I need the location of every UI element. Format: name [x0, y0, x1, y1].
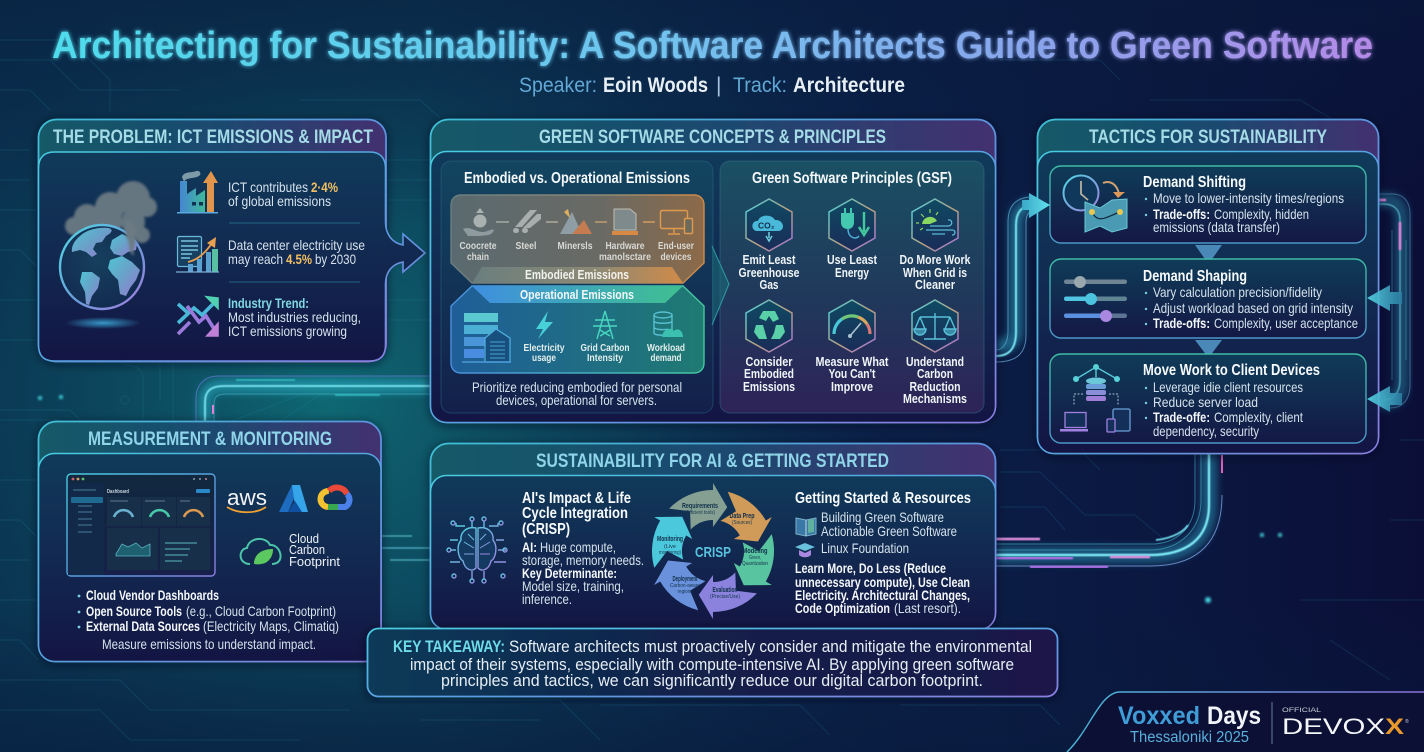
connector: measurement to AI glow — [381, 536, 430, 560]
text: AI impact: AI: — [522, 539, 537, 555]
panel heading: AI: SUSTAINABILITY FOR AI & GETTING STARTED — [536, 451, 889, 472]
sub-panel: green software principles — [712, 161, 984, 413]
arrow: into demand shifting — [1022, 193, 1050, 218]
card: move work to client devices: Leverage idie client resources — [1153, 379, 1303, 395]
card: demand shaping: Trade-offs: — [1153, 315, 1210, 331]
logo: aws: aws — [227, 485, 267, 510]
diagram: CRISP cycle: Requirements — [682, 503, 718, 510]
principle: understand carbon reduction mechanisms: Reduction — [910, 379, 961, 394]
panel heading: tactics: TACTICS FOR SUSTAINABILITY — [1089, 127, 1327, 148]
stat: industry trend: ICT emissions growing — [228, 323, 347, 339]
principle: measure what you can't improve: Improve — [831, 379, 873, 394]
stat: data center electricity — [228, 237, 365, 267]
card: demand shaping: Adjust workload based on grid intensity — [1153, 300, 1353, 316]
subtitle: speaker and track: Track: — [733, 74, 787, 97]
stat: ICT contributes: 2·4% — [311, 179, 338, 195]
stat: data center electricity: 4.5% — [286, 251, 312, 267]
card: move work to client devices — [1050, 354, 1366, 443]
subtitle: speaker and track: | — [716, 74, 721, 97]
block: operational emissions: Workload — [647, 342, 685, 354]
callout: key takeaway: impact of their systems, especially with compute-intensive AI. By applying green software — [410, 655, 1014, 674]
sub-panel: embodied vs operational — [441, 161, 713, 413]
panel: the problem — [38, 120, 425, 362]
list: measurement tools: (Electricity Maps, Climatiq) — [203, 618, 339, 634]
arrow: into client devices — [1367, 386, 1402, 412]
icon: hardware — [612, 209, 638, 235]
logo: Voxxed Days — [1118, 702, 1261, 746]
logo: google cloud — [320, 488, 349, 507]
block: operational emissions: Electricity — [524, 342, 565, 354]
diagram: CRISP cycle: Green, — [749, 555, 761, 561]
text: AI impact: AI's Impact & Life — [522, 490, 631, 507]
sub-heading: embodied vs operational: Embodied vs. Operational Emissions — [464, 170, 690, 187]
illustration: globe with smoke — [60, 181, 157, 329]
stat: industry trend: Industry Trend: — [228, 295, 309, 311]
logo: cloud carbon footprint — [241, 532, 341, 569]
diagram: CRISP cycle: Deployment — [672, 576, 698, 583]
card: demand shaping: Complexity, user acceptance — [1214, 315, 1358, 331]
text: AI impact: Huge compute, — [540, 539, 616, 555]
stat: ICT contributes: of global emissions — [228, 193, 331, 209]
text: AI impact: Cycle Integration — [522, 505, 628, 522]
diagram: CRISP cycle: (Precise/Use) — [710, 594, 740, 600]
icon: database workload — [654, 312, 683, 337]
icon: sliders — [1064, 276, 1127, 322]
diagram: CRISP cycle: Evaluation — [712, 587, 738, 594]
list: measurement tools: External Data Sources — [86, 618, 200, 634]
text: getting started and resources: Code Optimization — [795, 600, 890, 616]
principle: understand carbon reduction mechanisms: Mechanisms — [903, 391, 967, 406]
logo: Voxxed Days: Thessaloniki 2025 — [1130, 729, 1249, 746]
diagram: CRISP cycle: CRISP — [695, 544, 731, 561]
stat: data center electricity: may reach — [228, 251, 283, 267]
principle: understand carbon reduction mechanisms: Carbon — [917, 366, 953, 381]
card: move work to client devices: Complexity, client — [1214, 409, 1303, 425]
icon: supply chain bag — [463, 208, 494, 236]
callout: key takeaway — [368, 628, 1058, 696]
block: operational emissions: Intensity — [587, 352, 623, 364]
text: AI impact: storage, memory needs. — [522, 552, 644, 568]
principle: use least energy: Use Least — [827, 252, 878, 267]
text: AI impact: Model size, training, — [522, 578, 624, 594]
card: demand shaping: Vary calculation precision/fidelity — [1153, 284, 1322, 300]
diagram: CRISP cycle: (Live — [664, 544, 676, 550]
block: embodied emissions: devices — [660, 251, 692, 263]
illustration: dashboard screenshot — [67, 474, 215, 576]
block: operational emissions: Operational Emissions — [520, 287, 634, 302]
logo: official Devoxx — [1282, 707, 1409, 739]
stat: industry trend — [228, 295, 361, 339]
principle: do more work when grid is cleaner: When Grid is — [903, 265, 967, 280]
block: embodied emissions: Coocrete — [460, 240, 497, 252]
icon: document and rising chart — [176, 236, 219, 272]
icon: database and devices — [1060, 364, 1130, 432]
logo: cloud carbon footprint: Carbon — [289, 543, 325, 557]
logo: official Devoxx: X — [1385, 714, 1404, 739]
diagram: CRISP cycle: Monitoring — [657, 536, 683, 543]
text: AI impact — [522, 490, 644, 607]
diagram: CRISP cycle: Carbon-aware — [670, 583, 700, 589]
icon: open book — [796, 518, 816, 536]
text: getting started and resources — [795, 490, 971, 616]
text: prioritize note: devices, operational for servers. — [496, 392, 657, 408]
logo: official Devoxx: DEVOX — [1282, 714, 1385, 739]
principle: emit least greenhouse gas — [738, 199, 800, 292]
footer: event branding — [1067, 692, 1424, 752]
principle: emit least greenhouse gas: Emit Least — [742, 252, 796, 267]
diagram: CRISP cycle: Modeling — [742, 548, 768, 555]
stat: ICT contributes — [228, 179, 338, 209]
card: move work to client devices: Move Work to Client Devices — [1143, 362, 1320, 379]
diagram: CRISP cycle: regions — [678, 589, 693, 595]
text: getting started and resources: Getting Started & Resources — [795, 490, 971, 507]
block: operational emissions — [451, 286, 704, 373]
principle: consider embodied emissions: Consider — [746, 354, 792, 369]
diagram: CRISP cycle: monitoring) — [659, 550, 681, 556]
icon: servers and building — [462, 313, 511, 362]
stat: industry trend: Most industries reducing, — [228, 309, 361, 325]
connector: tactics to AI pipe — [996, 454, 1222, 571]
card: demand shaping — [1050, 259, 1366, 338]
block: embodied emissions: Steel — [516, 240, 537, 252]
stat: data center electricity: by 2030 — [315, 251, 356, 267]
block: embodied emissions: Hardware — [606, 240, 645, 252]
principle: emit least greenhouse gas: CO₂ — [758, 220, 775, 230]
logo: azure — [279, 485, 308, 512]
card: move work to client devices: Reduce server load — [1153, 394, 1258, 410]
text: measurement note: Measure emissions to understand impact. — [102, 636, 316, 652]
block: embodied emissions: manolsctare — [599, 251, 651, 263]
text: getting started and resources: Electricity. Architectural Changes, — [795, 587, 970, 603]
subtitle: speaker and track: Architecture — [793, 74, 905, 97]
connector: concepts to tactics pipe — [996, 197, 1036, 362]
text: AI impact: Key Determinante: — [522, 565, 617, 581]
callout: key takeaway: KEY TAKEAWAY: — [393, 637, 505, 656]
panel heading: concepts: GREEN SOFTWARE CONCEPTS & PRINCIPLES — [539, 127, 886, 148]
list: measurement tools — [78, 587, 339, 634]
text: prioritize note: Prioritize reducing embodied for personal — [472, 379, 682, 395]
icon: AI brain — [447, 517, 507, 583]
text: getting started and resources: Actionable Green Software — [821, 523, 957, 539]
card: demand shifting — [1050, 166, 1366, 243]
text: getting started and resources: Linux Foundation — [821, 540, 909, 556]
callout: key takeaway: Software architects must proactively consider and mitigate the environmental — [509, 637, 1032, 656]
block: embodied emissions: chain — [467, 251, 489, 263]
logo: official Devoxx: ® — [1405, 718, 1409, 725]
principle: do more work when grid is cleaner: Do More Work — [900, 252, 971, 267]
principle: do more work when grid is cleaner — [900, 199, 971, 292]
card: move work to client devices: Trade-offe: — [1153, 409, 1210, 425]
panel: green software concepts — [430, 120, 996, 422]
logo: cloud carbon footprint: Cloud — [289, 532, 319, 546]
card: demand shifting: emissions (data transfer) — [1153, 219, 1280, 235]
card: demand shifting: Demand Shifting — [1143, 174, 1246, 191]
panel: tactics for sustainability — [1038, 120, 1378, 454]
text: getting started and resources: (Last resort). — [894, 600, 961, 616]
card: move work to client devices: dependency, security — [1153, 423, 1259, 439]
block: embodied emissions — [451, 195, 704, 283]
text: getting started and resources: Learn More, Do Less (Reduce — [795, 560, 946, 576]
text: getting started and resources: unnecessary compute), Use Clean — [795, 574, 970, 590]
principle: measure what you can't improve: You Can't — [828, 366, 876, 381]
subtitle: speaker and track — [519, 74, 905, 97]
principle: understand carbon reduction mechanisms: Understand — [906, 354, 964, 369]
illustration: dashboard screenshot: Dashboard — [107, 489, 129, 495]
icon: factory with up arrow — [177, 171, 218, 214]
block: embodied emissions: End-user — [658, 240, 694, 252]
text: AI impact: inference. — [522, 591, 572, 607]
subtitle: speaker and track: Speaker: — [519, 74, 597, 97]
logo: Voxxed Days: Voxxed — [1118, 702, 1200, 730]
card: demand shaping: Demand Shaping — [1143, 268, 1247, 285]
list: measurement tools: Cloud Vendor Dashboards — [86, 587, 219, 603]
panel: measurement and monitoring — [38, 422, 381, 662]
list: measurement tools: (e.g., Cloud Carbon Footprint) — [186, 603, 336, 619]
card: demand shifting: Move to lower-intensity times/regions — [1153, 190, 1344, 206]
connector: problem to measurement pipe — [196, 376, 430, 421]
principle: consider embodied emissions — [743, 300, 795, 394]
logo: Voxxed Days: Days — [1207, 702, 1261, 730]
icon: transmission tower — [593, 311, 617, 339]
arrow: chevron between sub-panels — [712, 246, 729, 325]
panel heading: the problem: THE PROBLEM: ICT EMISSIONS & IMPACT — [53, 127, 373, 148]
icon: minerals — [560, 209, 592, 234]
principle: consider embodied emissions: Emissions — [743, 379, 795, 394]
arrow: into demand shaping — [1367, 285, 1402, 311]
list: measurement tools: Open Source Tools — [86, 603, 182, 619]
text: prioritize note — [472, 379, 682, 408]
block: operational emissions: usage — [532, 352, 556, 364]
subtitle: speaker and track: Eoin Woods — [603, 74, 708, 97]
diagram: CRISP cycle: (Efficient tools) — [685, 510, 715, 516]
icon: end-user devices — [660, 210, 692, 234]
logo: cloud carbon footprint: Footprint — [289, 555, 341, 569]
principle: emit least greenhouse gas: Greenhouse — [738, 265, 800, 280]
icon: lightning bolt — [536, 311, 553, 339]
principle: use least energy: Energy — [835, 265, 870, 280]
block: embodied emissions: Embodied Emissions — [525, 267, 629, 282]
panel: sustainability for AI — [430, 444, 996, 630]
principle: measure what you can't improve — [816, 300, 889, 394]
principle: emit least greenhouse gas: Gas — [760, 277, 778, 292]
stat: data center electricity: Data center electricity use — [228, 237, 365, 253]
card: demand shifting: Trade-offs: — [1153, 206, 1210, 222]
diagram: CRISP cycle: (Sources) — [732, 520, 752, 526]
principle: consider embodied emissions: Embodied — [744, 366, 794, 381]
icon: steel beams — [513, 210, 541, 233]
principle: measure what you can't improve: Measure What — [816, 354, 889, 369]
connector: tactics feedback pipe — [1366, 194, 1410, 408]
callout: key takeaway: principles and tactics, we can significantly reduce our digital carbon footprint. — [441, 671, 983, 690]
sub-heading: principles: Green Software Principles (GSF) — [752, 170, 952, 187]
principle: understand carbon reduction mechanisms — [903, 300, 967, 406]
icon: crossing trend arrows — [178, 298, 217, 335]
principle: do more work when grid is cleaner: Cleaner — [915, 277, 955, 292]
inner card with arrow — [38, 152, 425, 361]
text: getting started and resources: Building Green Software — [821, 509, 944, 525]
arrow: shaping to client devices — [1195, 340, 1222, 358]
icon: clock and map — [1064, 176, 1127, 232]
diagram: CRISP cycle: Data Prep — [730, 513, 754, 520]
diagram: CRISP cycle: Quantization — [742, 561, 768, 567]
stat: ICT contributes: ICT contributes — [228, 179, 308, 195]
block: operational emissions: demand — [650, 352, 682, 364]
arrow: shifting to shaping — [1195, 245, 1222, 264]
block: embodied emissions: Minersls — [558, 240, 593, 252]
text: AI impact: (CRISP) — [522, 521, 570, 538]
principle: use least energy — [827, 199, 878, 280]
diagram: CRISP cycle — [637, 480, 789, 622]
logo: official Devoxx: OFFICIAL — [1282, 707, 1321, 714]
panel heading: measurement: MEASUREMENT & MONITORING — [88, 429, 332, 450]
card: demand shifting: Complexity, hidden — [1214, 206, 1309, 222]
icon: graduation cap — [795, 543, 815, 557]
block: operational emissions: Grid Carbon — [580, 342, 630, 354]
title: Architecting for Sustainability: A Software Architects Guide to Green Software — [52, 25, 1373, 67]
